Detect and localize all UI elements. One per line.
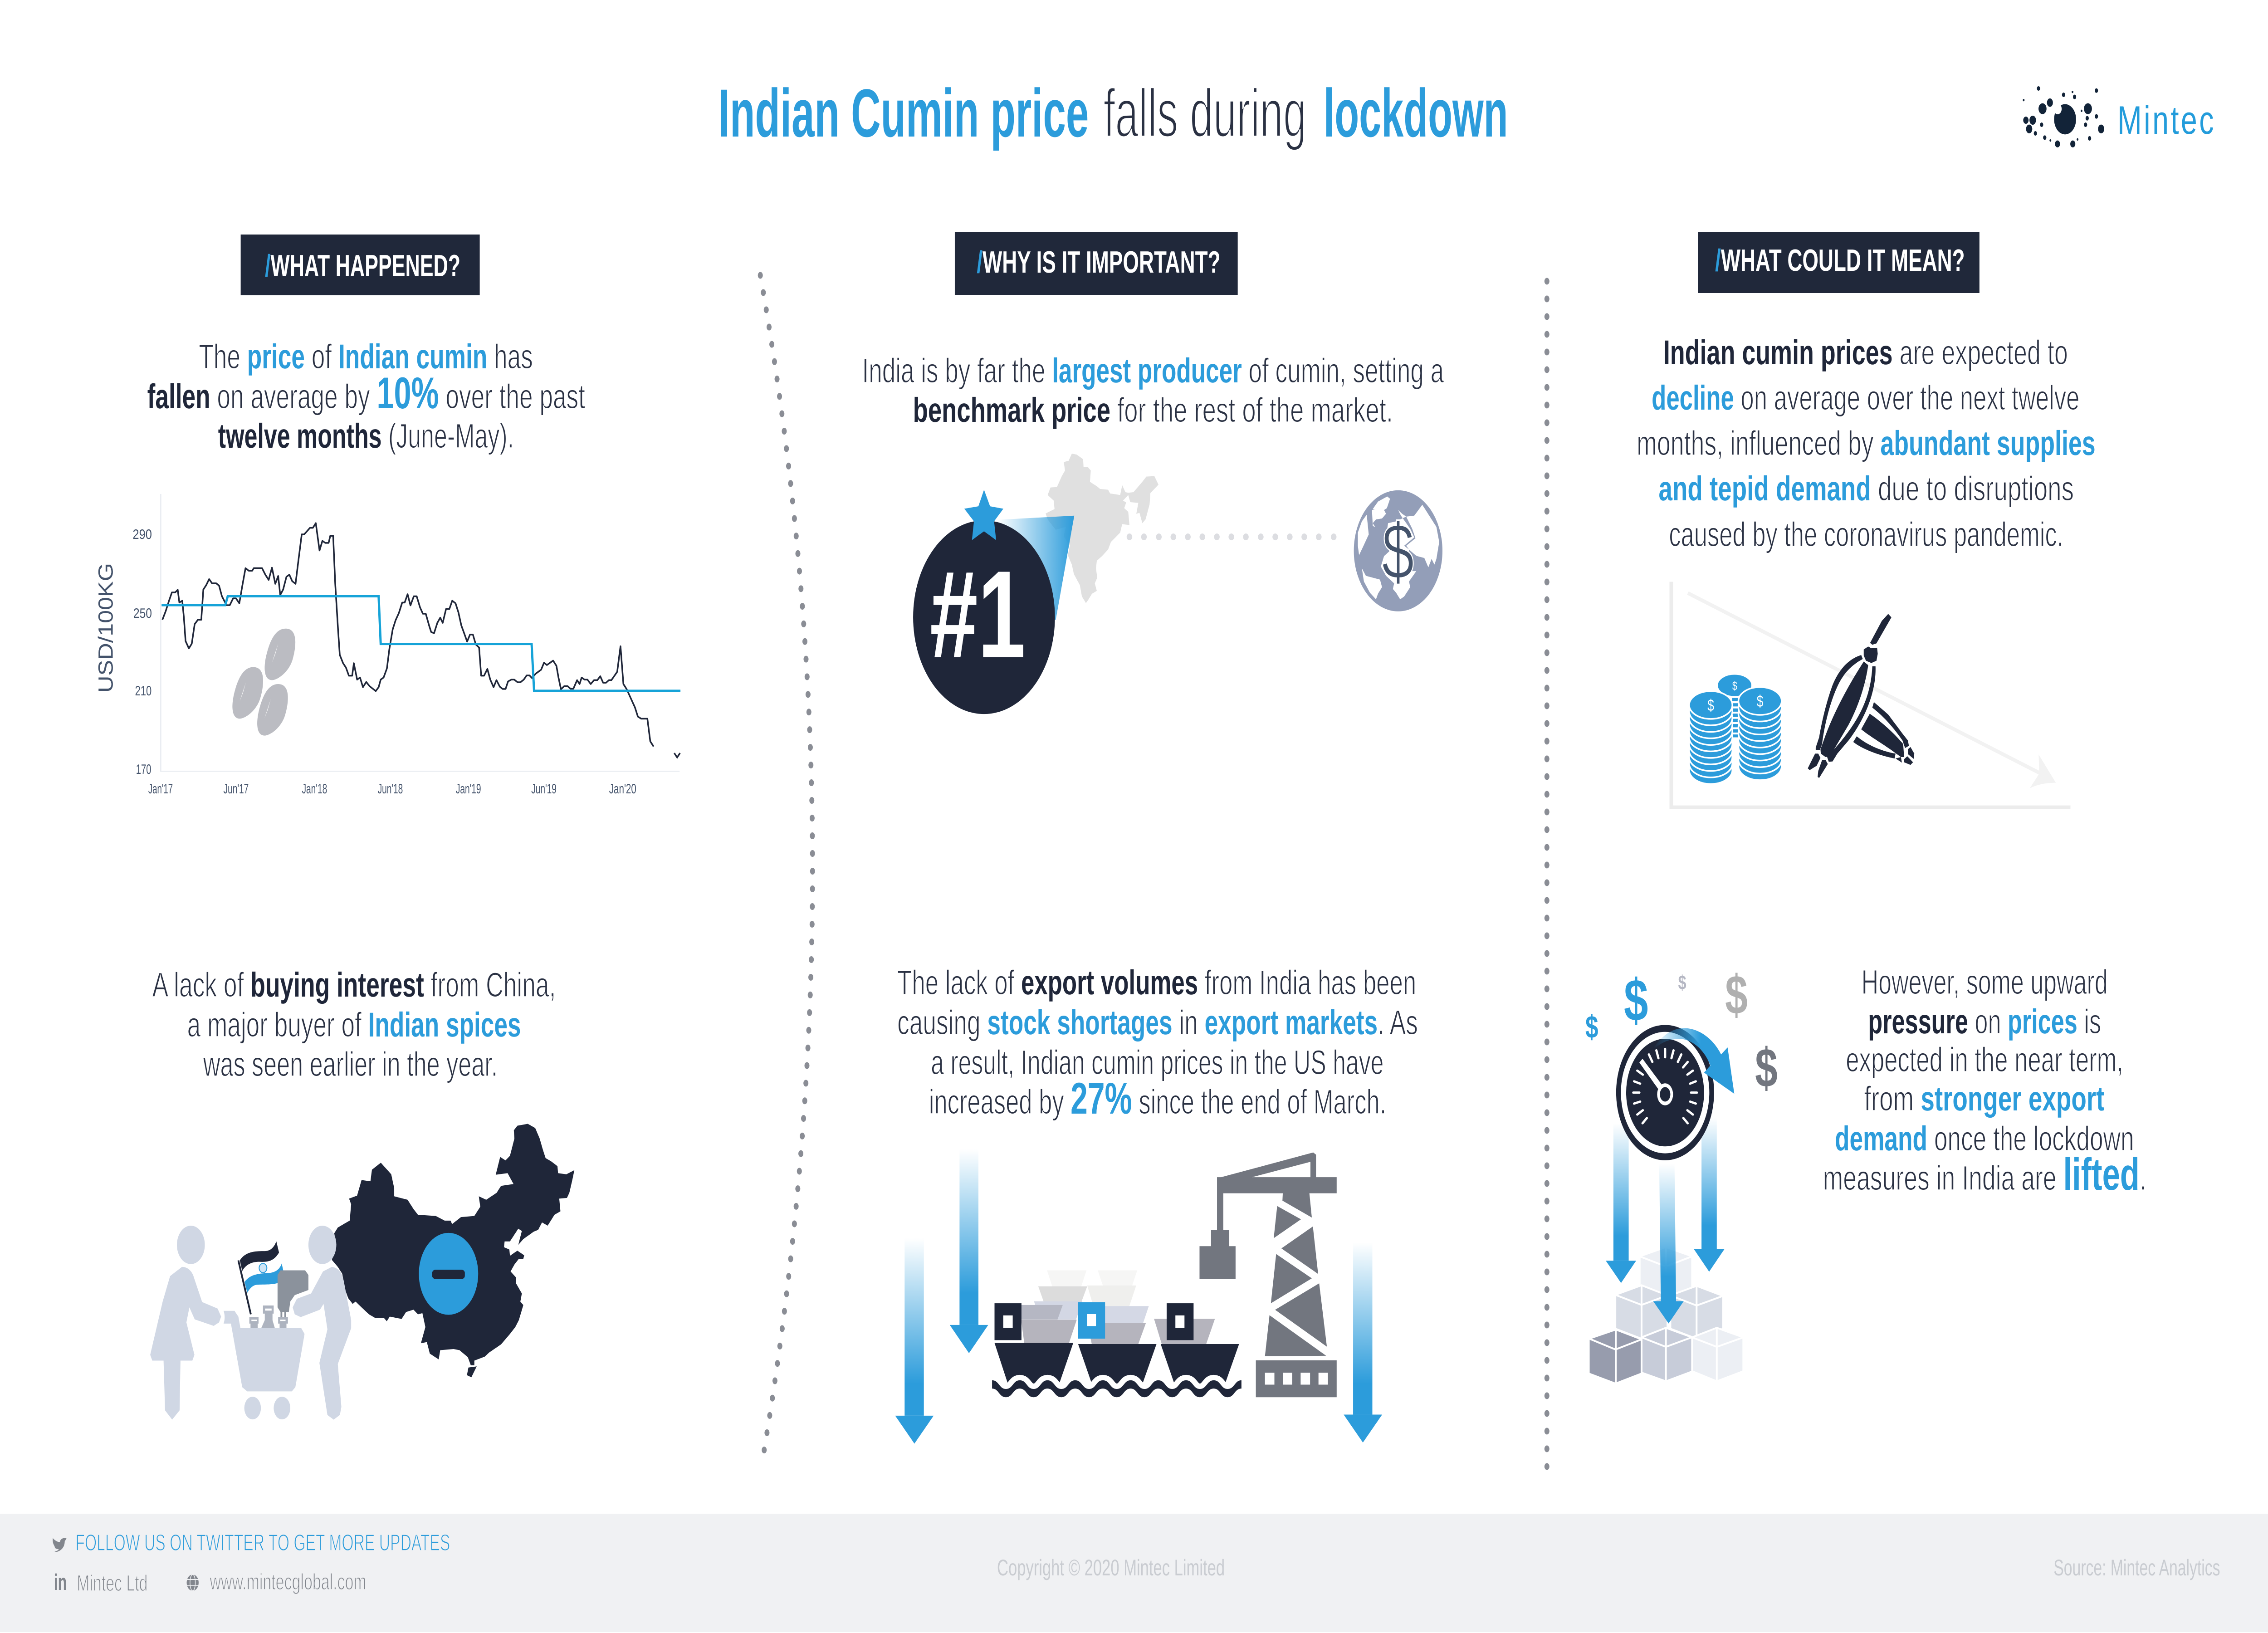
dotted connector (1127, 533, 1336, 540)
text: lack of export volumes (897, 963, 1418, 1123)
footer (0, 1514, 2268, 1632)
illustration: #1 producer India to global benchmark (913, 454, 1442, 714)
text: lack of buying interest: a major buyer of Indian spices (187, 1006, 521, 1044)
arrow: curved clockwise (1652, 1028, 1734, 1094)
heading: what happened (241, 235, 480, 295)
text: lack of export volumes: a result, Indian cumin prices in the US have (931, 1043, 1383, 1082)
text: upward pressure on prices: from stronger export (1864, 1080, 2104, 1118)
icon: ship hulls (995, 1343, 1239, 1386)
text: price of Indian cumin has fallen (147, 337, 585, 455)
text: Indian cumin prices expected to decline (1637, 333, 2096, 554)
title: lockdown (1324, 75, 1508, 151)
icon: woman shopper (150, 1226, 221, 1420)
illustration: #1 producer India to global benchmark: #1 (930, 545, 1026, 684)
text: Indian cumin prices expected to decline: months, influenced by abundant supplies (1637, 424, 2096, 463)
icon: containers (1021, 1270, 1215, 1344)
arrow: down second (950, 1149, 988, 1353)
logo: Mintec: Mintec (2117, 98, 2214, 142)
arrow: down left (895, 1238, 934, 1444)
icon: cumin seeds (232, 629, 295, 736)
line chart: cumin price USD/100KG: 290 (132, 527, 152, 542)
map: China with minus (332, 1124, 574, 1377)
line chart: cumin price USD/100KG: 250 (133, 606, 152, 621)
text: lack of buying interest: A lack of buying interest from China, (152, 966, 556, 1004)
icon: dollar signs: $ (1755, 1037, 1778, 1099)
text: Indian cumin prices expected to decline: decline on average over the next twelve (1652, 379, 2079, 417)
text: upward pressure on prices: demand once the lockdown (1835, 1120, 2134, 1158)
illustration: falling price chart with coins and seeds: $ (1732, 679, 1737, 693)
icon: ship funnels (995, 1302, 1193, 1340)
icon: dollar signs: $ (1624, 967, 1648, 1033)
illustration: falling price chart with coins and seeds (1672, 582, 2070, 807)
icon: shopping cart (224, 1311, 304, 1419)
icon: twitter (53, 1538, 67, 1552)
icon: bottles and bag (249, 1271, 308, 1328)
illustration: shoppers and China map (150, 1124, 574, 1420)
text: India largest producer: India is by far the largest producer of cumin, setting a (862, 352, 1444, 390)
icon: Indian flag (238, 1242, 284, 1314)
text: copyright: Copyright © 2020 Mintec Limited (997, 1555, 1225, 1580)
icon: man shopper (293, 1226, 351, 1420)
icon: linkedin: in (54, 1569, 67, 1595)
icon: web globe (187, 1574, 199, 1591)
text: India largest producer (862, 352, 1444, 430)
text: lack of buying interest (152, 966, 556, 1084)
icon: dollar signs: $ (1678, 972, 1686, 994)
heading: what happened: /WHAT HAPPENED? (265, 249, 460, 283)
icon: star (964, 490, 1003, 540)
text: lack of buying interest: was seen earlier in the year. (203, 1045, 498, 1084)
arrow: down left (1606, 1123, 1636, 1283)
illustration: falling price chart with coins and seeds: $ (1707, 696, 1714, 714)
heading: why is it important (955, 232, 1238, 295)
text: lack of export volumes: causing stock shortages in export markets. As (897, 1003, 1418, 1042)
icon: dollar signs (1585, 964, 1778, 1099)
title (719, 75, 1508, 151)
arrow: down right (1694, 1118, 1725, 1271)
line chart: cumin price USD/100KG: Jun'19 (531, 782, 557, 797)
icon: coin stacks (1689, 674, 1782, 784)
arrow: down center (1653, 1164, 1684, 1324)
text: source: Source: Mintec Analytics (2053, 1555, 2220, 1580)
text: Indian cumin prices expected to decline: Indian cumin prices are expected to (1663, 333, 2068, 372)
text: upward pressure on prices: However, some upward (1862, 963, 2108, 1002)
line chart: cumin price USD/100KG: Jun'18 (378, 782, 403, 797)
text: lack of export volumes: increased by 27% since the end of March. (929, 1073, 1386, 1123)
line chart: cumin price USD/100KG: Jan'19 (456, 782, 481, 797)
heading: what could it mean (1698, 232, 1980, 293)
icon: dollar signs: $ (1585, 1009, 1598, 1045)
icon: cumin seeds dark (1808, 614, 1914, 778)
illustration: gauge, dollars, arrows and cubes (1585, 964, 1778, 1384)
icon: dollar signs: $ (1725, 964, 1748, 1026)
text: upward pressure on prices (1823, 963, 2146, 1200)
icon: crane (1199, 1153, 1337, 1397)
text: upward pressure on prices: measures in India are lifted. (1823, 1149, 2146, 1200)
map: India (1046, 454, 1158, 603)
icon: speed gauge (1616, 1025, 1714, 1160)
line chart: cumin price USD/100KG: 210 (135, 684, 152, 699)
illustration: ships and crane with down arrows (895, 1149, 1382, 1444)
text: Mintec Ltd: Mintec Ltd (77, 1570, 147, 1596)
line chart: cumin price USD/100KG: Jun'17 (224, 782, 249, 797)
line chart: cumin price USD/100KG: USD/100KG (94, 563, 117, 693)
chart axes (1672, 582, 2070, 807)
text: price of Indian cumin has fallen: fallen on average by 10% over the past (147, 368, 585, 418)
text: upward pressure on prices: expected in the near term, (1846, 1041, 2123, 1079)
text: follow on twitter: FOLLOW US ON TWITTER TO GET MORE UPDATES (75, 1530, 450, 1555)
heading: what could it mean: /WHAT COULD IT MEAN? (1715, 243, 1965, 278)
line chart: cumin price USD/100KG: Jan'18 (302, 782, 327, 797)
text: price of Indian cumin has fallen: The price of Indian cumin has (199, 337, 533, 376)
line chart: cumin price USD/100KG (94, 494, 680, 797)
text: upward pressure on prices: pressure on prices is (1868, 1002, 2101, 1041)
text: Indian cumin prices expected to decline: and tepid demand due to disruptions (1659, 469, 2074, 508)
logo: Mintec (2023, 86, 2214, 147)
text: price of Indian cumin has fallen: twelve months (June-May). (218, 417, 514, 455)
text: India largest producer: benchmark price for the rest of the market. (913, 391, 1393, 430)
line chart: cumin price USD/100KG: Jan'17 (148, 782, 173, 797)
text: website: www.mintecglobal.com (210, 1569, 367, 1594)
line chart: cumin price USD/100KG: 170 (136, 762, 151, 777)
icon: number one circle (913, 520, 1055, 714)
illustration: falling price chart with coins and seeds: $ (1757, 692, 1763, 710)
title: falls during (1104, 75, 1306, 151)
illustration: #1 producer India to global benchmark: $ (1382, 508, 1414, 596)
icon: stock cubes (1589, 1247, 1743, 1384)
arrow: falling trend (1688, 593, 2056, 788)
icon: globe (1354, 490, 1442, 611)
title: Indian Cumin price (719, 75, 1089, 151)
text: lack of export volumes: The lack of export volumes from India has been (897, 963, 1416, 1002)
line chart: cumin price USD/100KG: Jan'20 (609, 782, 636, 797)
icon: water waves (992, 1380, 1242, 1397)
text: Indian cumin prices expected to decline: caused by the coronavirus pandemic. (1669, 515, 2063, 554)
heading: why is it important: /WHY IS IT IMPORTANT? (977, 245, 1221, 279)
arrow: down right (1344, 1242, 1382, 1442)
